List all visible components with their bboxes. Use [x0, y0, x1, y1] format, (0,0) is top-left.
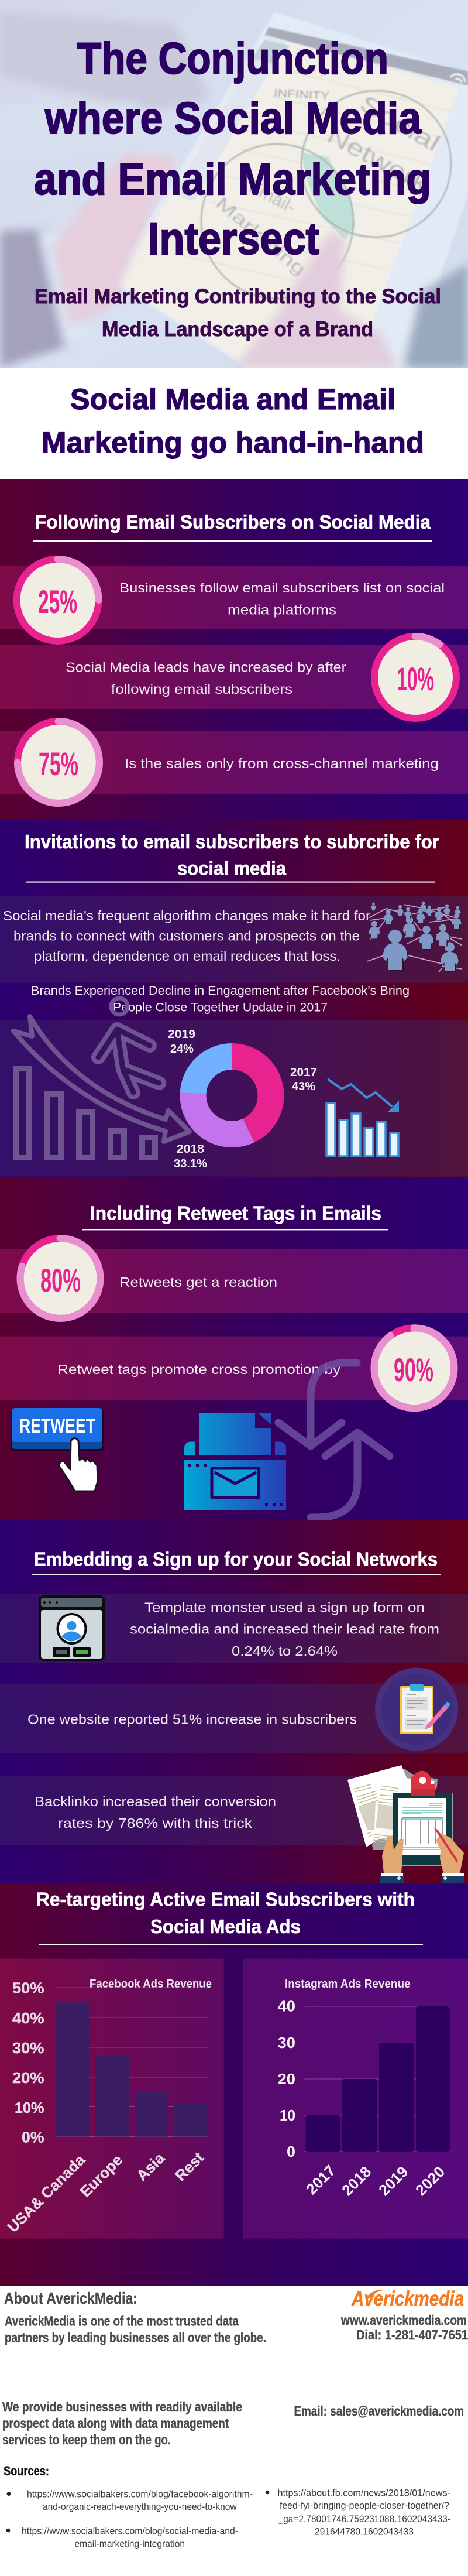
icon: faded exchange arrows: [278, 1363, 390, 1517]
text: template monster: socialmedia and increased their lead rate from: [130, 1622, 439, 1637]
stat: 80 percent: 80%: [40, 1262, 81, 1299]
panel: hero photo background: INFINITY: [274, 87, 330, 102]
stat: 90 percent: 90%: [394, 1351, 433, 1388]
panel: instagram ads chart: 2019: [375, 2163, 411, 2199]
panel: facebook ads chart: Rest: [171, 2149, 207, 2184]
text: algorithm changes: platform, dependence on email reduces that loss.: [34, 948, 340, 964]
sources list: https://about.fb.com/news/2018/01/news-: [277, 2488, 450, 2499]
icon: clipboard with hands: [347, 1765, 464, 1883]
panel: facebook ads chart: 50%: [12, 1979, 44, 1996]
panel: about AverickMedia: We provide businesses with readily available: [2, 2399, 242, 2414]
panel: white intro heading: [0, 368, 468, 479]
stat: 25 percent: 25%: [38, 583, 77, 620]
icon: retweet button: RETWEET: [19, 1415, 95, 1437]
sources list: _ga=2.78001746.759231088.1602043433-: [278, 2513, 450, 2524]
text: template monster: [130, 1599, 439, 1659]
panel: instagram ads chart: 2020: [412, 2163, 448, 2199]
icon: faded walker: [98, 998, 159, 1092]
panel: about AverickMedia: partners by leading businesses all over the globe.: [5, 2330, 266, 2345]
text: one website: One website reported 51% increase in subscribers: [27, 1712, 357, 1727]
panel: facebook ads chart: [0, 1959, 224, 2239]
heading: invitations: Invitations to email subscribers to subrcribe for: [25, 831, 439, 852]
stat: 80 percent: [20, 1238, 101, 1318]
sources list: 291644780.1602043433: [315, 2526, 414, 2537]
sources list: [6, 2488, 450, 2550]
chart: engagement donut: [193, 1056, 271, 1135]
heading: invitations: social media: [177, 857, 287, 879]
panel: facebook ads chart: Facebook Ads Revenue: [90, 1978, 212, 1991]
text: algorithm changes: brands to connect with customers and prospects on the: [13, 929, 360, 944]
stat: 90 percent: [374, 1328, 454, 1408]
heading: invitations: [25, 831, 439, 879]
text: backlinko: Backlinko increased their conversion: [35, 1794, 276, 1809]
sources heading: Sources:: [4, 2464, 49, 2478]
panel: facebook ads chart: 10%: [15, 2099, 44, 2116]
text: algorithm changes: [3, 908, 370, 964]
panel: hero photo background: [0, 0, 468, 368]
stat: 75 percent: [18, 721, 99, 803]
sources list: feed-fyi-bringing-people-closer-together/?: [280, 2500, 449, 2511]
subtitle: Media Landscape of a Brand: [102, 318, 373, 341]
text: social media leads: [66, 659, 346, 697]
title: The Conjunction: [77, 34, 388, 84]
sources list: and-organic-reach-everything-you-need-to-know: [43, 2501, 237, 2512]
panel: facebook ads chart: 40%: [12, 2009, 44, 2027]
text: backlinko: rates by 786% with this trick: [58, 1815, 253, 1831]
panel: about AverickMedia: services to keep them on the go.: [2, 2432, 171, 2447]
icon: sign up window: [39, 1595, 105, 1661]
panel: facebook ads chart: USA& Canada: [4, 2151, 89, 2236]
title: and Email Marketing: [34, 155, 431, 204]
chart labels: donut values: 2018: [177, 1143, 204, 1156]
panel: hero photo background: Network: [323, 122, 433, 198]
panel: facebook ads chart: Asia: [133, 2149, 168, 2184]
subtitle: [35, 285, 441, 341]
text: businesses follow: [119, 580, 445, 617]
panel: instagram ads chart: 20: [277, 2070, 295, 2088]
text: cross promotion: Retweet tags promote cross promotion by: [57, 1362, 341, 1377]
text: backlinko: [35, 1794, 276, 1831]
chart title: decline in engagement: People Close Together Update in 2017: [113, 1001, 328, 1014]
panel: about AverickMedia: [0, 2286, 468, 2576]
icon: email printer: [184, 1413, 286, 1510]
chart title: decline in engagement: [31, 984, 410, 1014]
panel: about AverickMedia: prospect data along with data management: [2, 2416, 229, 2431]
icon: clipboard with pen: [375, 1667, 458, 1751]
sources list: email-marketing-integration: [75, 2539, 185, 2550]
icon: faded declining bars: [16, 1068, 155, 1157]
text: retweets reaction: Retweets get a reaction: [119, 1275, 277, 1290]
icon: faded down arrow: [13, 1016, 190, 1142]
panel: instagram ads chart: 2018: [338, 2163, 374, 2199]
panel: hero photo background: Email-: [246, 177, 298, 217]
panel: white intro heading: Social Media and Email: [70, 383, 395, 416]
text: algorithm changes: Social media's frequent algorithm changes make it hard for: [3, 908, 370, 923]
panel: following email subscribers: [0, 479, 468, 820]
panel: instagram ads chart: 0: [287, 2143, 295, 2160]
chart labels: donut values: 2017: [290, 1066, 317, 1079]
chart labels: donut values: 24%: [170, 1043, 194, 1056]
heading: retweet tags: Including Retweet Tags in Emails: [90, 1203, 381, 1224]
title: Intersect: [148, 214, 319, 264]
panel: facebook ads chart: 0%: [22, 2129, 44, 2146]
stat: 25 percent: [16, 559, 98, 641]
text: social media leads: following email subscribers: [111, 681, 292, 697]
title: where Social Media: [44, 94, 422, 143]
panel: instagram ads chart: 10: [280, 2106, 295, 2124]
panel: facebook ads chart: 30%: [12, 2039, 44, 2057]
text: template monster: Template monster used a sign up form on: [144, 1599, 425, 1615]
panel: instagram ads chart: Instagram Ads Revenue: [285, 1978, 411, 1991]
contact details: [294, 2313, 468, 2419]
title: [34, 34, 431, 264]
heading: retargeting: Social Media Ads: [150, 1916, 301, 1937]
chart labels: donut values: 33.1%: [174, 1157, 207, 1170]
stat: 75 percent: 75%: [39, 745, 78, 782]
panel: instagram ads chart: [243, 1959, 468, 2239]
panel: facebook ads chart: Europe: [77, 2151, 126, 2201]
panel: facebook ads chart: 20%: [12, 2069, 44, 2087]
icon: people network: [367, 902, 462, 972]
icon: retweet button: [11, 1408, 104, 1451]
icon: blue falling bar chart: [326, 1079, 399, 1156]
heading: following email subscribers: Following Email Subscribers on Social Media: [35, 511, 431, 533]
sources list: https://www.socialbakers.com/blog/facebook-algorithm-: [27, 2489, 253, 2500]
panel: instagram ads chart: 2017: [302, 2161, 339, 2198]
text: businesses follow: media platforms: [228, 602, 336, 617]
panel: white intro heading: Marketing go hand-in-hand: [42, 426, 424, 459]
panel: embedding sign up: [0, 1520, 468, 1883]
heading: retargeting: [36, 1889, 415, 1937]
chart labels: donut values: 43%: [292, 1080, 315, 1093]
panel: hero photo background: Social: [356, 91, 444, 157]
text: cross-channel sales: Is the sales only from cross-channel marketing: [125, 756, 439, 771]
text: template monster: 0.24% to 2.64%: [232, 1643, 338, 1659]
icon: hand cursor: [59, 1438, 98, 1491]
subtitle: Email Marketing Contributing to the Social: [35, 285, 441, 308]
stat: 10 percent: [374, 636, 456, 718]
chart labels: donut values: 2019: [168, 1028, 195, 1041]
chart labels: donut values: [168, 1028, 317, 1170]
stat: 10 percent: 10%: [397, 660, 434, 697]
heading: retargeting: Re-targeting Active Email Subscribers with: [36, 1889, 415, 1910]
sources list: https://www.socialbakers.com/blog/social-media-and-: [22, 2525, 238, 2536]
heading: embedding sign up: Embedding a Sign up for your Social Networks: [34, 1548, 438, 1570]
text: businesses follow: Businesses follow email subscribers list on social: [119, 580, 445, 595]
panel: hero photo background: Marketing: [212, 193, 309, 279]
panel: instagram ads chart: 40: [277, 1998, 295, 2015]
chart title: decline in engagement: Brands Experienced Decline in Engagement after Facebook's Bring: [31, 984, 410, 998]
text: social media leads: Social Media leads have increased by after: [66, 659, 346, 674]
panel: retargeting with ads: [0, 1883, 468, 2286]
panel: about AverickMedia: AverickMedia is one of the most trusted data: [5, 2314, 239, 2329]
panel: retweet tags: [0, 1177, 468, 1520]
panel: instagram ads chart: 30: [277, 2034, 295, 2051]
panel: invitations to subscribe: [0, 820, 468, 1177]
panel: about AverickMedia: About AverickMedia:: [4, 2289, 137, 2307]
